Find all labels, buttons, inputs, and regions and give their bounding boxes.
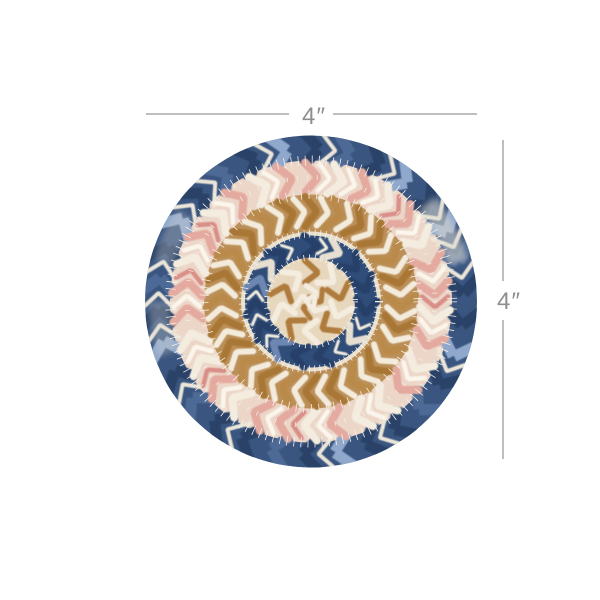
lighter worn patches on outer braid xyxy=(159,204,458,354)
width dimension line xyxy=(146,113,477,115)
inner blue braid xyxy=(245,236,377,368)
outer blue braid xyxy=(141,132,481,472)
height label: 4″ xyxy=(497,288,520,315)
braided coaster xyxy=(141,132,481,472)
centre tan and cream braid xyxy=(270,260,352,342)
pink and cream braid xyxy=(172,162,450,440)
width label: 4″ xyxy=(302,103,325,130)
tan and cream braid xyxy=(206,196,416,406)
frayed fibres xyxy=(170,160,452,442)
height dimension line xyxy=(502,140,504,459)
infographic: braided coaster with dimensions xyxy=(145,108,520,468)
